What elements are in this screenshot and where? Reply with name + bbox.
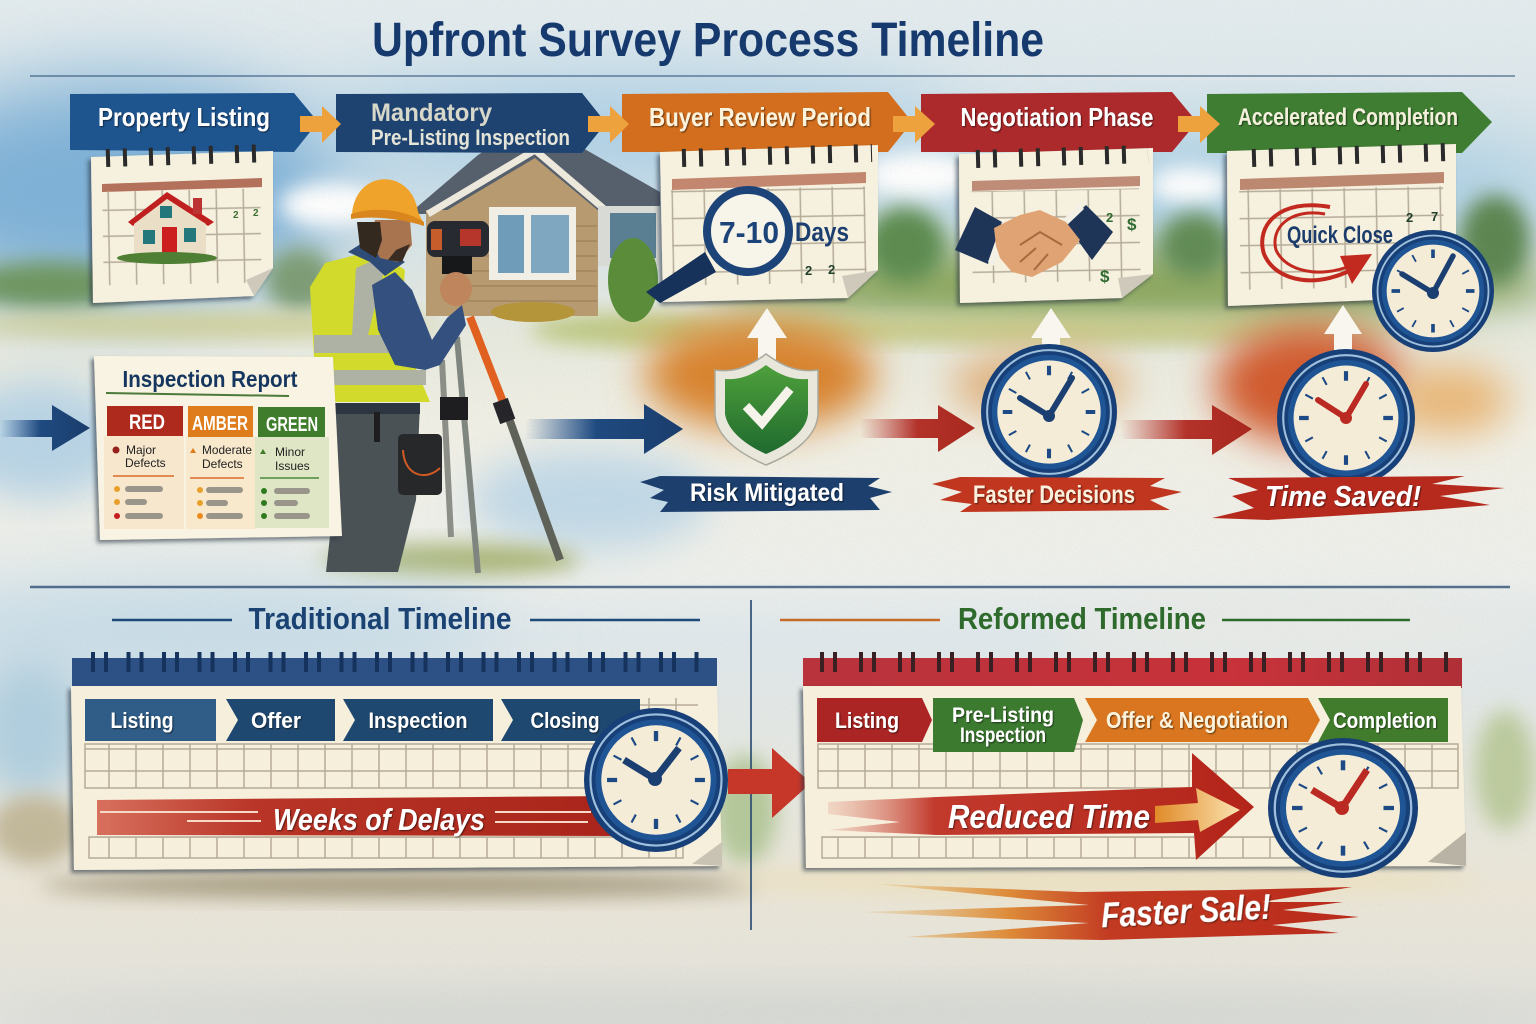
neck and collar	[348, 238, 405, 276]
calendar 1: property listing	[91, 151, 273, 303]
icon: handshake	[955, 204, 1113, 277]
hard hat	[352, 179, 424, 224]
house illustration	[417, 135, 660, 322]
calendar 4: accelerated completion	[1227, 144, 1456, 306]
step banner: Accelerated Completion: Accelerated Completion	[1238, 104, 1458, 131]
step: closing: Closing	[530, 708, 600, 733]
icon: shield	[715, 354, 818, 465]
step banner: Property Listing	[70, 93, 318, 152]
step: pre-listing inspection	[933, 698, 1083, 752]
step: listing: Listing	[835, 708, 899, 733]
arrow: traditional to reformed	[728, 748, 811, 818]
column: amber: AMBER	[192, 413, 248, 435]
icon: house	[117, 192, 217, 264]
step: closing	[501, 699, 640, 741]
connector arrow 3	[893, 106, 935, 143]
step: inspection: Inspection	[368, 708, 468, 733]
tripod	[440, 317, 560, 573]
banner: faster decisions	[932, 477, 1182, 512]
step: offer and negotiation: Offer & Negotiation	[1106, 707, 1288, 733]
icon: quick close swoosh	[1262, 205, 1372, 284]
column: green: GREEN	[266, 414, 318, 436]
heading: traditional timeline: Traditional Timeline	[248, 601, 512, 636]
step: listing: Listing	[110, 708, 174, 733]
banner: risk mitigated: Risk Mitigated	[690, 479, 844, 507]
calendar 2: buyer review: Days	[795, 217, 849, 247]
calendar 3: negotiation: $	[1100, 267, 1110, 286]
icon: magnifying glass with 7-10	[646, 190, 789, 303]
clock: traditional	[584, 708, 728, 852]
calendar 2: buyer review: 2	[828, 262, 835, 277]
column: green: Issues	[275, 459, 310, 473]
column: red: Major	[126, 443, 156, 457]
step banner: Property Listing: Property Listing	[98, 102, 270, 132]
connector arrow 1	[300, 106, 341, 143]
column: red: Defects	[125, 456, 166, 470]
step: pre-listing inspection: Pre-Listing	[952, 704, 1054, 727]
step banner: Negotiation Phase: Negotiation Phase	[960, 102, 1154, 132]
step: listing	[85, 699, 216, 741]
arrow: decisions to time saved	[1120, 405, 1252, 455]
surveying instrument	[427, 221, 489, 274]
column: red: RED	[129, 411, 165, 434]
step: offer	[226, 699, 335, 741]
step: completion	[1318, 698, 1448, 742]
banner: faster sale	[860, 884, 1359, 940]
banner: time saved: Time Saved!	[1265, 481, 1421, 513]
banner: time saved	[1212, 476, 1505, 520]
calendar 4: accelerated completion: 2	[1406, 210, 1413, 225]
banner: weeks of delays: Weeks of Delays	[273, 802, 485, 837]
column: red	[104, 406, 184, 529]
icon: magnifying glass with 7-10: 7-10	[719, 215, 779, 250]
step: pre-listing inspection: Inspection	[960, 724, 1046, 747]
legs	[326, 403, 420, 572]
clock: reformed	[1268, 738, 1418, 878]
column: amber: Moderate	[202, 443, 252, 457]
calendar 2: buyer review: 2	[805, 263, 812, 278]
calendar 4: accelerated completion: 7	[1431, 209, 1438, 224]
banner: risk mitigated	[640, 476, 892, 512]
step: inspection	[343, 699, 493, 741]
step banner: Negotiation Phase	[921, 92, 1197, 152]
up arrow: clock to negotiation	[1031, 308, 1071, 356]
calendar 3: negotiation	[955, 148, 1153, 303]
calendar 3: negotiation: $	[1127, 215, 1137, 234]
column: amber	[186, 406, 256, 529]
calendar 3: negotiation: 2	[1106, 210, 1113, 225]
step banner: Accelerated Completion	[1207, 92, 1492, 153]
arrow into report	[0, 405, 90, 451]
column: green: Minor	[275, 445, 305, 459]
arm	[372, 272, 466, 370]
title: Upfront Survey Process Timeline	[372, 14, 1044, 67]
arrow: survey to risk	[525, 404, 683, 454]
step banner: Buyer Review Period: Buyer Review Period	[649, 102, 871, 132]
calendar 1: property listing: 2	[253, 208, 259, 219]
column: green	[255, 407, 329, 528]
inspection report: Inspection Report	[122, 366, 298, 392]
arrow: reduced time	[828, 753, 1254, 860]
arrow: risk to decisions	[860, 405, 975, 452]
step: offer and negotiation	[1085, 698, 1320, 742]
calendar 2: buyer review	[646, 145, 878, 303]
connector arrow 2	[588, 106, 629, 143]
step: offer: Offer	[251, 708, 301, 733]
panel: reformed calendar	[803, 658, 1466, 868]
tool pouch	[398, 434, 442, 495]
arrow: reduced time: Reduced Time	[948, 798, 1150, 835]
inspection report	[94, 356, 342, 540]
clock: faster decisions	[981, 344, 1117, 480]
step: completion: Completion	[1333, 708, 1437, 733]
head	[370, 220, 412, 262]
step: listing	[817, 698, 932, 742]
up arrow: shield to buyer review	[747, 308, 787, 362]
step banner: Buyer Review Period	[622, 92, 912, 152]
step banner: Mandatory Pre-Listing Inspection	[336, 93, 606, 153]
up arrow: clock to completion	[1324, 305, 1362, 356]
banner: faster decisions: Faster Decisions	[973, 481, 1135, 509]
clock: time saved	[1277, 349, 1415, 487]
step banner: Mandatory Pre-Listing Inspection: Mandatory	[371, 99, 492, 127]
banner: faster sale: Faster Sale!	[1100, 888, 1272, 935]
calendar 4: accelerated completion: Quick Close	[1287, 222, 1393, 249]
step banner: Mandatory Pre-Listing Inspection: Pre-Listing Inspection	[371, 125, 570, 150]
banner: weeks of delays	[97, 796, 620, 837]
clock: accelerated completion	[1372, 230, 1494, 352]
torso vest	[310, 250, 430, 402]
column: amber: Defects	[202, 457, 243, 471]
heading: reformed timeline: Reformed Timeline	[958, 601, 1206, 636]
connector arrow 4	[1178, 106, 1220, 143]
calendar 1: property listing: 2	[233, 210, 239, 221]
panel: traditional calendar	[71, 658, 722, 870]
surveyor figure	[310, 179, 560, 573]
